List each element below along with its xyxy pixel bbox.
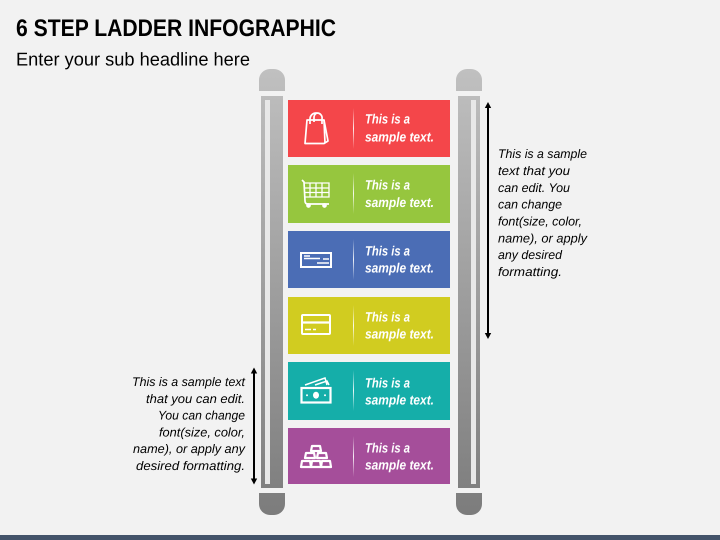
subtitle: Enter your sub headline here	[16, 48, 250, 70]
icon: shopping bag	[305, 113, 328, 144]
footer bar	[0, 535, 720, 540]
arrow: right double-headed	[485, 102, 491, 339]
step 5: teal banknotes: This is a	[365, 376, 410, 390]
step 5: teal banknotes: sample text.	[365, 392, 434, 408]
right ladder rail	[456, 69, 482, 515]
step 4: yellow credit card: sample text.	[365, 326, 434, 342]
text block: left note: that you can edit.	[146, 392, 245, 406]
icon: credit card	[302, 315, 330, 334]
step 4: yellow credit card: This is a	[365, 310, 410, 324]
icon: banknotes	[302, 378, 330, 402]
step 3: blue cheque	[288, 231, 450, 288]
icon: gold bars	[301, 446, 331, 467]
title: 6 STEP LADDER INFOGRAPHIC	[16, 15, 336, 42]
text block: left note: desired formatting.	[136, 459, 245, 473]
text block: left note: name), or apply any	[133, 442, 246, 456]
step 1: red shopping bag: sample text.	[365, 130, 434, 144]
step 2: green shopping cart: This is a	[365, 178, 410, 192]
text block: left note	[132, 375, 246, 473]
text block: right note: formatting.	[498, 265, 562, 279]
text block: right note: any desired	[498, 248, 563, 262]
text block: right note: text that you	[498, 164, 570, 178]
step 4: yellow credit card	[288, 297, 450, 354]
icon: shopping cart	[302, 180, 329, 207]
text block: right note: can change	[498, 198, 562, 212]
text block: right note: This is a sample	[498, 147, 587, 161]
text block: right note: can edit. You	[498, 181, 570, 195]
step 6: purple gold bars: sample text.	[365, 458, 434, 472]
text block: right note: font(size, color,	[498, 214, 582, 228]
step 3: blue cheque: This is a	[365, 244, 410, 258]
step 2: green shopping cart: sample text.	[365, 195, 434, 210]
text block: right note	[498, 147, 588, 279]
icon: cheque	[301, 253, 331, 267]
arrow: left double-headed	[251, 368, 257, 484]
text block: left note: This is a sample text	[132, 375, 246, 389]
step 1: red shopping bag: This is a	[365, 112, 410, 126]
step 3: blue cheque: sample text.	[365, 260, 434, 276]
left ladder rail	[259, 69, 285, 515]
step 6: purple gold bars: This is a	[365, 440, 410, 456]
step 1: red shopping bag	[288, 100, 450, 157]
step 6: purple gold bars	[288, 428, 450, 484]
step 5: teal banknotes	[288, 362, 450, 420]
text block: left note: You can change	[158, 408, 245, 422]
step 2: green shopping cart	[288, 165, 450, 223]
text block: right note: name), or apply	[498, 232, 588, 246]
text block: left note: font(size, color,	[159, 426, 245, 440]
